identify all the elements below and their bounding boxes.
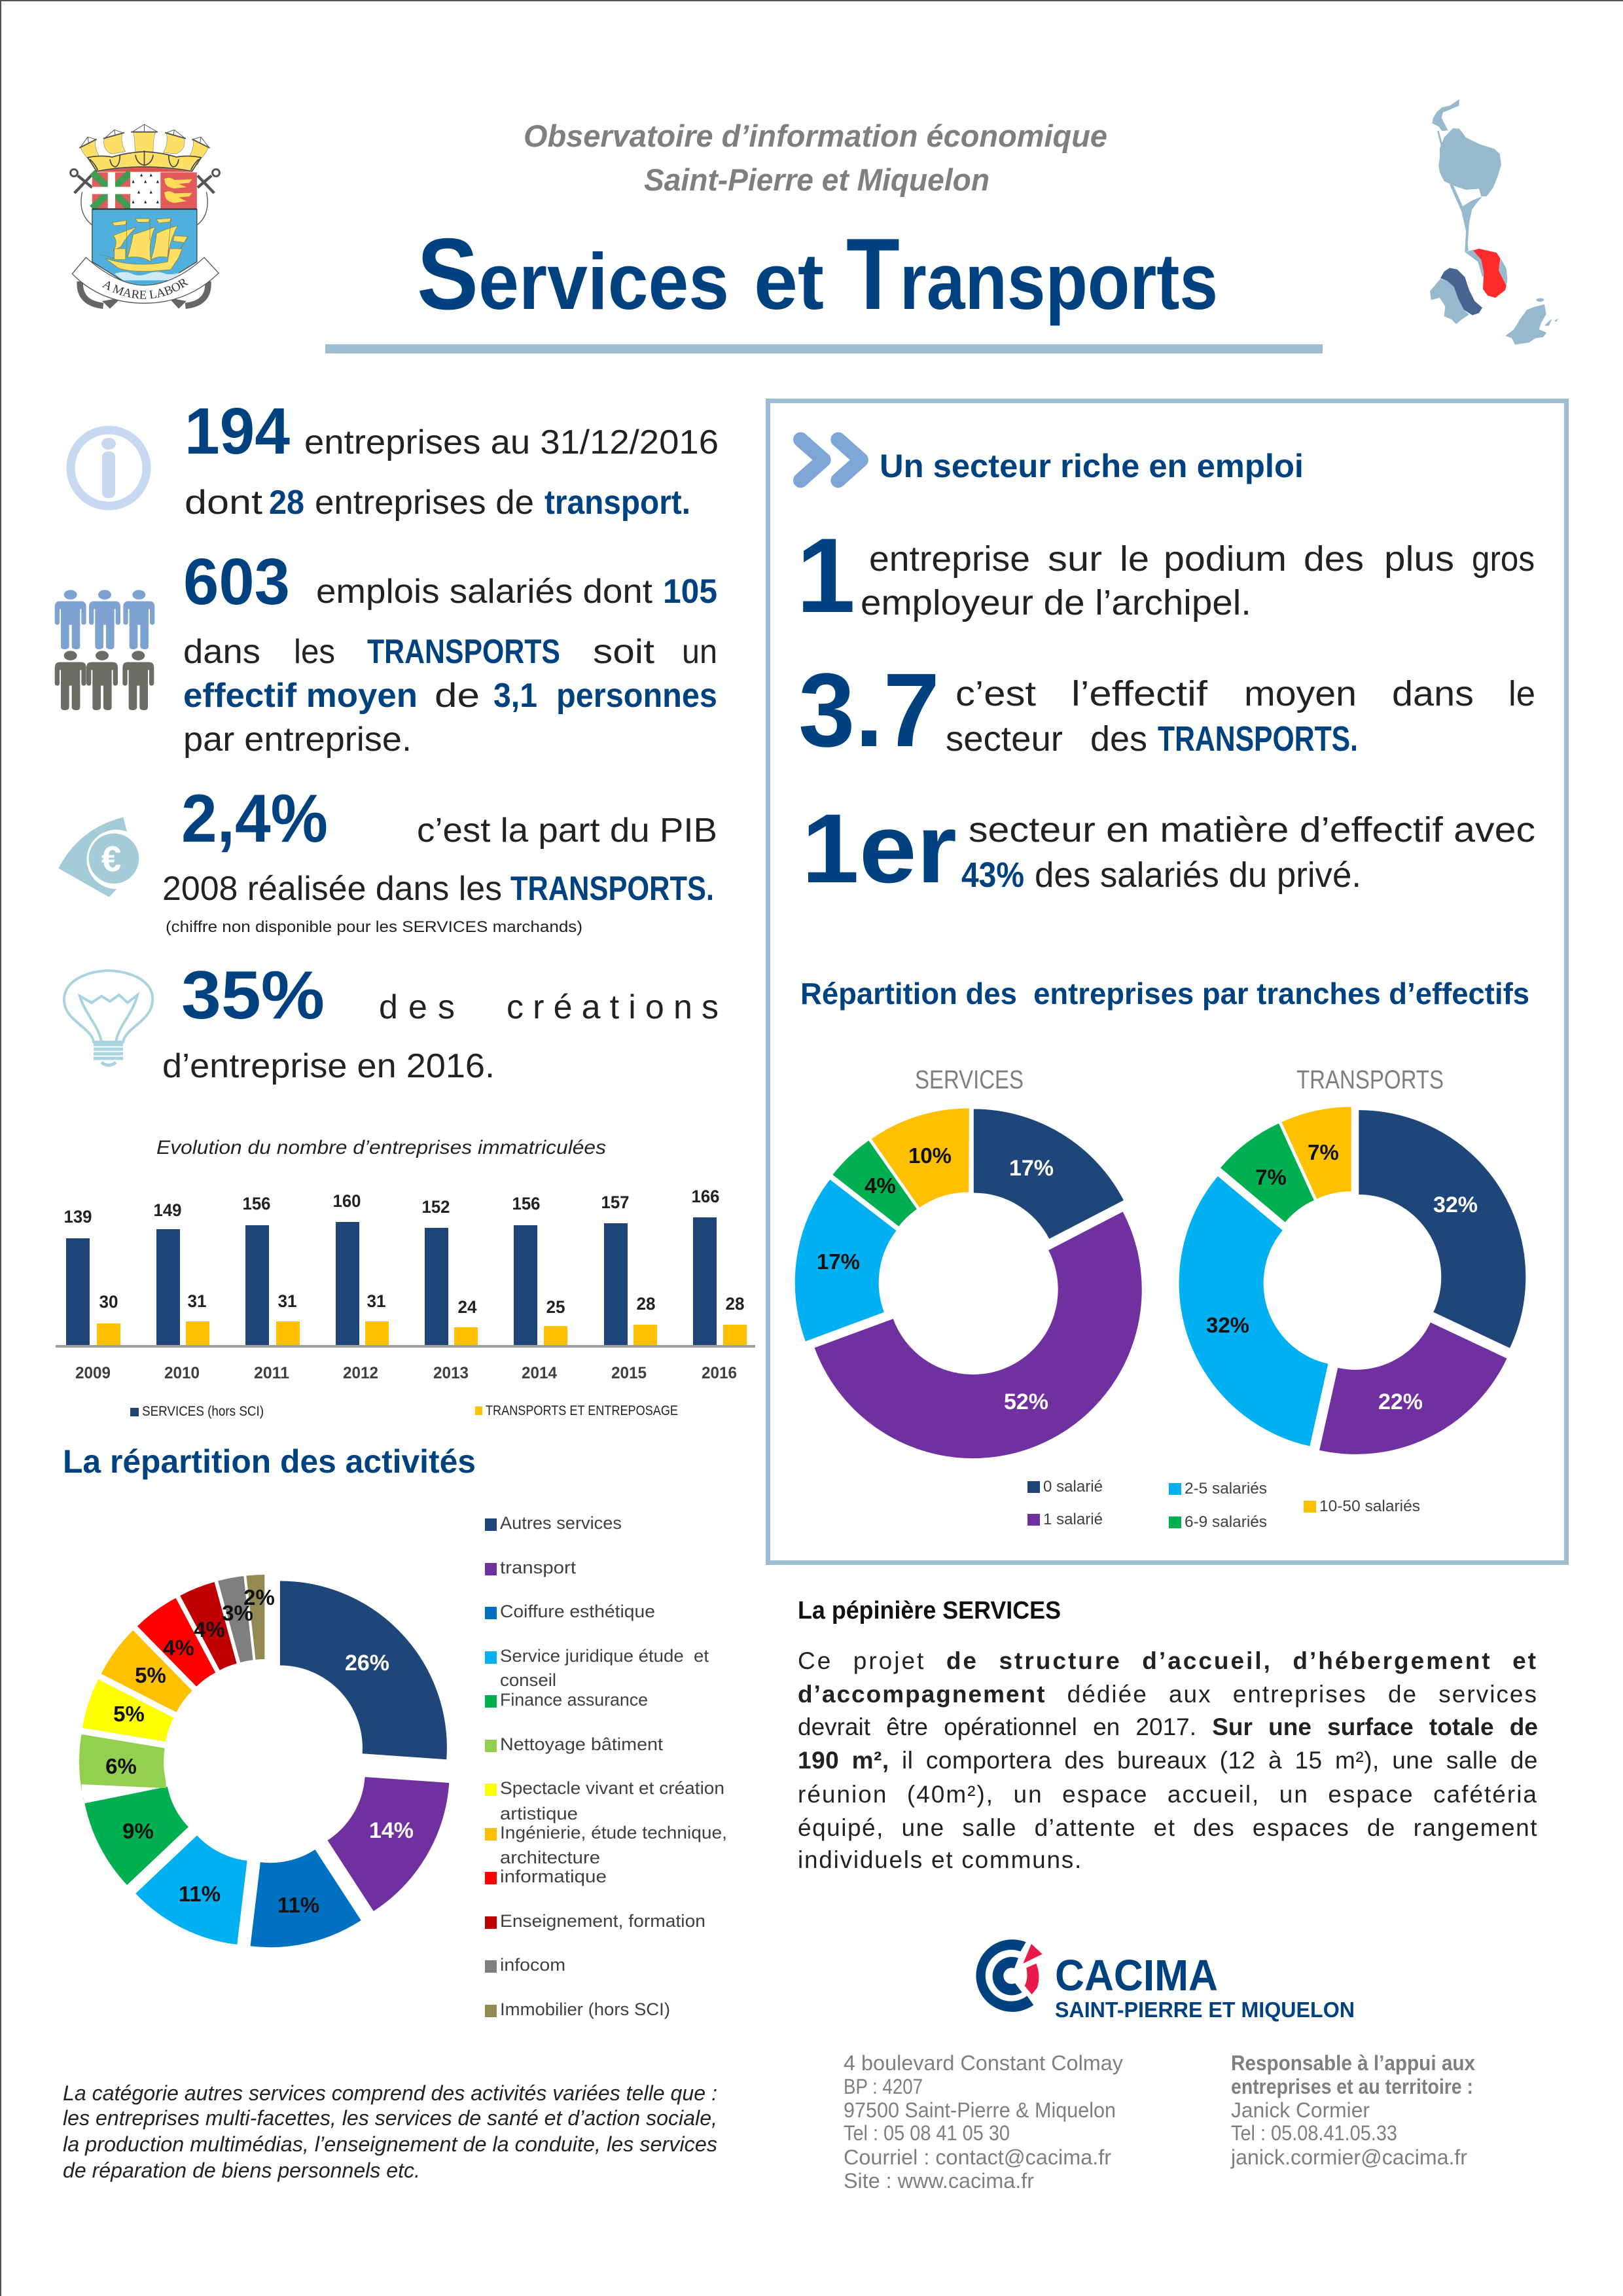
logo: CACIMA: CACIMA [1055, 1951, 1218, 2000]
stat: 1er secteur [802, 793, 1535, 903]
stat: 603 emplois: un [682, 633, 717, 671]
legend: activités: Spectacle vivant et création [500, 1778, 724, 1798]
donut chart: transports [1173, 1100, 1524, 1453]
icon: people [55, 590, 154, 710]
labels: 10% [908, 1143, 952, 1168]
subtitle: observatoire: Observatoire d’information économique [524, 118, 1107, 153]
value labels: 31 [187, 1291, 207, 1311]
icon: map of the archipelago [1430, 99, 1558, 345]
donut value labels: 3% [222, 1601, 253, 1625]
donut value labels: 5% [113, 1702, 145, 1726]
stat: 603 emplois: TRANSPORTS [367, 633, 560, 671]
donut value labels [105, 1585, 414, 1917]
stat: 35% créations: d’entreprise en 2016. [162, 1047, 495, 1085]
heading: répartition par tranches d'effectifs: Répartition des entreprises par tranches d’effectifs [800, 977, 1529, 1011]
year axis labels: 2013 [433, 1364, 469, 1382]
year axis labels: 2011 [254, 1364, 289, 1382]
stat: 1 entreprise: le [1120, 539, 1149, 579]
text block: la pépinière: d’accompagnement dédiée aux entreprises de services [798, 1681, 1538, 1708]
legend: tranches d'effectifs: 1 salarié [1043, 1511, 1103, 1528]
donut value labels: 5% [135, 1663, 166, 1687]
icon: coat of arms: A MARE LABOR [102, 279, 188, 299]
year axis labels: 2015 [611, 1364, 647, 1382]
legend: activités: architecture [500, 1848, 600, 1867]
donut chart: services [787, 1100, 1145, 1461]
icon: information [71, 430, 147, 506]
stat: 1 entreprise: sur [1048, 539, 1102, 579]
stat: 35% créations: des [379, 988, 455, 1026]
labels: 22% [1378, 1390, 1423, 1414]
footnote: autres services: les entreprises multi-facettes, les services de santé et d’action sociale, [63, 2106, 717, 2130]
stat: 3.7 effectif moyen: dans [1392, 674, 1474, 713]
icon: euro [58, 817, 139, 897]
contact: adresse: Courriel : contact@cacima.fr [844, 2145, 1111, 2169]
stat: 1 entreprise: 1 [796, 516, 855, 635]
stat: 3.7 effectif moyen: moyen [1244, 674, 1357, 713]
donut value labels: 14% [369, 1818, 414, 1843]
text block: la pépinière: 190 m², il comportera des bureaux (12 à 15 m²), une salle de [798, 1747, 1538, 1774]
legend: tranches d'effectifs [1027, 1478, 1420, 1531]
text block: la pépinière: individuels et communs. [798, 1846, 1082, 1873]
stat: 194 entreprises: dont [185, 484, 263, 522]
legend: activités [485, 1513, 727, 2019]
stat: 603 emplois: 3,1 [493, 677, 537, 715]
legend: activités: transport [500, 1558, 577, 1577]
year axis labels [75, 1364, 737, 1382]
stat: 3.7 effectif moyen: secteur [946, 719, 1063, 759]
stat: 1er secteur: secteur en matière d’effectif avec [969, 810, 1535, 850]
stat: 603 emplois: 105 [663, 573, 717, 611]
donut value labels: 4% [163, 1636, 194, 1660]
text block: la pépinière: devrait être opérationnel en 2017. Sur une surface totale de [798, 1713, 1538, 1740]
labels: 7% [1308, 1140, 1339, 1164]
footnote: autres services: de réparation de biens personnels etc. [63, 2159, 420, 2182]
title [417, 217, 1218, 331]
year axis labels: 2016 [702, 1364, 737, 1382]
stat: 603 emplois: par entreprise. [183, 721, 412, 759]
icon: coat of arms [69, 124, 221, 309]
donut value labels: 9% [122, 1819, 154, 1843]
icon: light bulb [64, 971, 152, 1066]
stat: 35% créations: 35% [181, 958, 325, 1033]
donut value labels: 6% [105, 1754, 137, 1778]
value labels: 166 [691, 1187, 720, 1206]
footnote: autres services: la production multimédias, l’enseignement de la conduite, les services [63, 2132, 717, 2156]
chart title: Evolution du nombre d’entreprises immatriculées [156, 1137, 606, 1158]
donut chart: activités [72, 1569, 442, 1953]
stat: 603 emplois: soit [593, 633, 655, 671]
text block: la pépinière [798, 1647, 1538, 1873]
stat: 1 entreprise: des [1304, 539, 1364, 579]
legend: activités: Ingénierie, étude technique, [500, 1823, 727, 1842]
stat: 1 entreprise: employeur de l’archipel. [861, 583, 1251, 622]
labels: 17% [1009, 1156, 1054, 1181]
stat: 3.7 effectif moyen [798, 651, 1535, 768]
legend: activités: Immobilier (hors SCI) [500, 2000, 670, 2019]
legend: activités: Nettoyage bâtiment [500, 1734, 664, 1754]
value labels: 156 [242, 1194, 271, 1213]
stat: 1 entreprise: gros [1472, 539, 1535, 579]
value labels: 31 [277, 1291, 297, 1311]
contact: responsable: Janick Cormier [1231, 2098, 1370, 2122]
chart title: transports: TRANSPORTS [1296, 1066, 1444, 1094]
stat: 1er secteur: des salariés du privé. [1035, 855, 1361, 895]
text block: la pépinière: équipé, une salle d’attente et des espaces de rangement [798, 1814, 1538, 1841]
stat: 35% créations [162, 958, 719, 1085]
donut value labels: 2% [243, 1585, 275, 1609]
stat: 603 emplois: 603 [183, 545, 290, 619]
stat: 1er secteur: 1er [802, 793, 957, 903]
stat: part du PIB: (chiffre non disponible pour les SERVICES marchands) [166, 918, 582, 936]
year axis labels: 2014 [522, 1364, 557, 1382]
stat: part du PIB: TRANSPORTS. [510, 870, 714, 908]
stat: 603 emplois: dans [183, 633, 260, 671]
stat: 603 emplois: de [435, 677, 480, 715]
legend: activités: Autres services [500, 1513, 622, 1533]
value labels: 157 [601, 1193, 630, 1212]
logo: CACIMA [976, 1939, 1355, 2022]
stat: 35% créations: créations [507, 988, 719, 1026]
contact: responsable [1230, 2051, 1475, 2169]
heading: la pépinière services: La pépinière SERVICES [798, 1597, 1061, 1624]
legend: activités: artistique [500, 1804, 578, 1823]
icon: euro: € [101, 838, 121, 879]
stat: 194 entreprises: 194 [185, 395, 290, 468]
logo: CACIMA: SAINT-PIERRE ET MIQUELON [1055, 1998, 1355, 2022]
labels: 52% [1004, 1390, 1048, 1414]
value labels: 28 [636, 1294, 656, 1314]
stat: 194 entreprises: entreprises au 31/12/2016 [304, 423, 719, 461]
contact: responsable: Tel : 05.08.41.05.33 [1231, 2121, 1397, 2145]
labels: 7% [1255, 1165, 1287, 1189]
contact: adresse: Site : www.cacima.fr [844, 2169, 1034, 2193]
year axis labels: 2010 [164, 1364, 200, 1382]
stat: 194 entreprises: transport. [544, 484, 690, 522]
labels [1206, 1140, 1478, 1414]
stat: 603 emplois: emplois salariés dont [316, 573, 653, 611]
subtitle: observatoire [524, 118, 1107, 197]
value labels: 25 [546, 1297, 565, 1317]
legend: activités: Service juridique étude et [500, 1646, 709, 1666]
stat: part du PIB: c’est la part du PIB [417, 812, 717, 850]
stat: part du PIB [162, 781, 717, 936]
icon: chevrons [800, 440, 861, 480]
text block: la pépinière: réunion (40m²), un espace accueil, un espace cafétéria [798, 1781, 1538, 1808]
text block: la pépinière: Ce projet de structure d’accueil, d’hébergement et [798, 1647, 1538, 1674]
value labels [64, 1187, 745, 1317]
contact: adresse: Tel : 05 08 41 05 30 [844, 2121, 1010, 2145]
donut value labels: 11% [179, 1882, 221, 1906]
stat: 603 emplois: personnes [556, 677, 717, 715]
donut value labels: 26% [345, 1651, 389, 1676]
legend: activités: conseil [500, 1670, 556, 1690]
stat: part du PIB: 2,4% [181, 781, 328, 857]
value labels: 152 [421, 1197, 450, 1217]
stat: 3.7 effectif moyen: l’effectif [1071, 674, 1208, 713]
legend: SERVICES (hors SCI) [142, 1404, 264, 1419]
contact: adresse [844, 2051, 1123, 2193]
value labels: 31 [366, 1291, 386, 1311]
value labels: 139 [64, 1207, 92, 1227]
stat: 1 entreprise: podium [1164, 539, 1287, 579]
legend: tranches d'effectifs: 6-9 salariés [1185, 1513, 1267, 1531]
stat: 194 entreprises [185, 395, 719, 522]
stat: part du PIB: 2008 réalisée dans les [162, 870, 502, 908]
contact: adresse: 97500 Saint-Pierre & Miquelon [844, 2098, 1116, 2122]
year axis labels: 2009 [75, 1364, 111, 1382]
title: et [754, 237, 824, 326]
stat: 1 entreprise: plus [1384, 539, 1454, 579]
stat: 1er secteur: 43% [961, 855, 1024, 895]
labels: 32% [1206, 1313, 1249, 1337]
stat: 603 emplois: les [294, 633, 335, 671]
legend: activités: infocom [500, 1955, 565, 1975]
labels: 32% [1433, 1193, 1478, 1217]
value labels: 30 [99, 1292, 118, 1312]
chart title: services: SERVICES [915, 1066, 1024, 1094]
footnote: autres services [63, 2081, 717, 2182]
legend: activités: Finance assurance [500, 1690, 648, 1710]
stat: 3.7 effectif moyen: le [1508, 674, 1535, 713]
value labels: 149 [153, 1200, 182, 1220]
legend: activités: informatique [500, 1867, 607, 1886]
donut value labels: 11% [277, 1893, 319, 1917]
contact: responsable: Responsable à l’appui aux [1231, 2051, 1475, 2075]
donut value labels: 4% [194, 1617, 225, 1641]
contact: adresse: BP : 4207 [844, 2075, 923, 2098]
labels: 4% [865, 1174, 896, 1198]
contact: responsable: janick.cormier@cacima.fr [1230, 2145, 1467, 2169]
stat: 1 entreprise: entreprise [869, 539, 1030, 579]
value labels: 160 [332, 1191, 361, 1211]
year axis labels: 2012 [343, 1364, 378, 1382]
legend [130, 1403, 678, 1419]
title: Services [417, 217, 729, 331]
labels: 17% [817, 1249, 860, 1274]
panel: un secteur riche en emploi [768, 401, 1567, 1563]
contact: adresse: 4 boulevard Constant Colmay [844, 2051, 1123, 2075]
stat: 194 entreprises: entreprises de [315, 484, 534, 522]
labels [817, 1143, 1054, 1414]
legend: tranches d'effectifs: 2-5 salariés [1185, 1480, 1267, 1498]
footnote: autres services: La catégorie autres services comprend des activités variées telle que : [63, 2081, 717, 2105]
bar chart: entreprises immatriculées [56, 1137, 755, 1419]
panel heading: Un secteur riche en emploi [880, 448, 1304, 484]
value labels: 24 [458, 1297, 476, 1317]
stat: 1 entreprise [796, 516, 1535, 635]
legend: activités: Enseignement, formation [500, 1911, 705, 1931]
legend: TRANSPORTS ET ENTREPOSAGE [486, 1403, 678, 1418]
bars services [66, 1217, 717, 1346]
title: Transports [846, 217, 1218, 331]
stat: 3.7 effectif moyen: des [1090, 719, 1147, 759]
contact: responsable: entreprises et au territoire : [1231, 2075, 1473, 2098]
stat: 3.7 effectif moyen: 3.7 [798, 651, 940, 768]
bars transports [97, 1321, 747, 1346]
subtitle: observatoire: Saint-Pierre et Miquelon [644, 162, 990, 197]
legend: tranches d'effectifs: 10-50 salariés [1319, 1498, 1420, 1515]
value labels: 28 [725, 1294, 745, 1314]
stat: 3.7 effectif moyen: c’est [955, 674, 1036, 713]
stat: 603 emplois: effectif moyen [183, 677, 418, 715]
stat: 603 emplois [183, 545, 717, 759]
stat: 3.7 effectif moyen: TRANSPORTS. [1158, 719, 1358, 759]
stat: 194 entreprises: 28 [269, 484, 304, 522]
legend: activités: Coiffure esthétique [500, 1602, 655, 1621]
value labels: 156 [512, 1194, 541, 1213]
heading: répartition des activités: La répartition des activités [63, 1443, 476, 1480]
legend: tranches d'effectifs: 0 salarié [1043, 1478, 1103, 1496]
